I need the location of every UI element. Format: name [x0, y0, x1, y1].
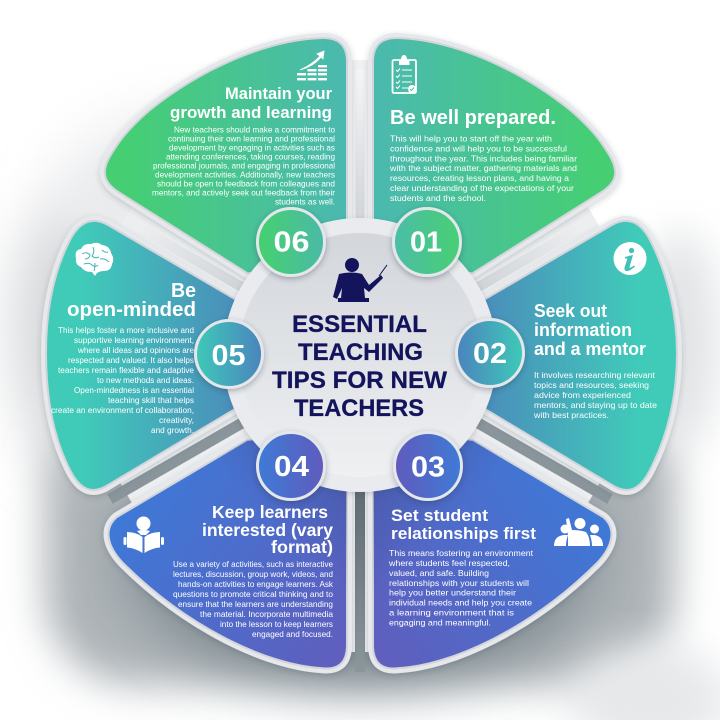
text: be open-minded body: create an environment of collaboration, — [51, 405, 194, 415]
text: be open-minded body: teachers remain flexible and adaptive — [58, 365, 194, 375]
icon: teacher with pointer — [333, 258, 387, 302]
heading: seek out information and a mentor: and a mentor — [534, 339, 646, 359]
text: set student relationships body: valued, and safe. Building — [389, 568, 489, 578]
panel: 05 be open-minded — [46, 221, 240, 490]
text: seek out information body: advice from experienced — [534, 390, 631, 400]
text: be open-minded body: Open-mindedness is an essential — [74, 385, 194, 395]
heading: be open-minded: Be — [171, 280, 196, 302]
heading: seek out information and a mentor: Seek out — [534, 301, 607, 321]
text: maintain growth body: continuing their own learning and professional — [168, 133, 335, 143]
text: maintain growth body: professional journals, and engaging in professional — [153, 160, 335, 170]
panel: 04 keep learners interested — [109, 430, 347, 669]
icon: growth chart — [297, 51, 327, 80]
badge 03 — [394, 432, 462, 500]
badge 04 — [258, 432, 324, 500]
text: keep learners body: into the lesson to keep learners — [220, 619, 333, 629]
badge 02: 02 — [473, 338, 507, 370]
badge 05: 05 — [212, 340, 246, 372]
text: keep learners body: hands-on activities to engage learners. Ask — [178, 579, 334, 589]
heading: maintain your growth and learning — [170, 84, 332, 122]
text: seek out information body: mentors, and staying up to date — [534, 400, 657, 410]
text: be open-minded body: creativity, — [159, 415, 194, 425]
text: be well prepared body — [389, 134, 577, 203]
text: set student relationships body: where students feel respected, — [388, 558, 510, 568]
heading: keep learners interested: interested (vary — [202, 520, 333, 540]
icon: person reading a book — [124, 516, 164, 553]
heading: keep learners interested: format) — [271, 537, 333, 557]
text: seek out information body: It involves researching relevant — [534, 370, 656, 380]
title: TEACHING — [298, 339, 423, 366]
text: maintain growth body: New teachers should make a commitment to — [174, 124, 335, 134]
text: be open-minded body: teaching skill that helps — [108, 395, 194, 405]
text: maintain growth body: attending conferences, taking courses, reading — [166, 151, 335, 161]
text: be open-minded body — [51, 325, 194, 435]
text: be open-minded body: supportive learning environment, — [74, 335, 194, 345]
text: keep learners body: questions to promote critical thinking and to — [173, 589, 333, 599]
text: maintain growth body: should be open to feedback from colleagues and — [157, 178, 335, 188]
title: ESSENTIAL — [292, 311, 427, 338]
text: set student relationships body: This means fostering an environment — [389, 548, 534, 558]
text: seek out information body — [533, 370, 657, 420]
title: TIPS FOR NEW — [272, 367, 448, 394]
icon: group of students — [554, 518, 603, 546]
text: maintain growth body: students as well. — [275, 196, 335, 206]
text: be open-minded body: to new methods and ideas. — [97, 375, 194, 385]
heading: be well prepared: Be well prepared. — [390, 107, 556, 129]
panel: 02 seek out information — [480, 221, 677, 490]
heading: set student relationships first — [391, 506, 536, 543]
text: set student relationships body: relationships with your students will — [389, 578, 529, 588]
text: maintain growth body: development by engaging in activities such as — [169, 142, 335, 152]
text: set student relationships body: engaging and meaningful. — [389, 618, 491, 628]
text: set student relationships body: individual needs and help you create — [389, 598, 532, 608]
heading: seek out information and a mentor — [534, 301, 646, 359]
text: set student relationships body: a learning environment that is — [389, 608, 514, 618]
text: be well prepared body: throughout the year. This includes being familiar — [390, 153, 577, 163]
heading: set student relationships first: Set student — [391, 506, 488, 525]
badge 01: 01 — [410, 226, 442, 258]
badge 06: 06 — [274, 226, 310, 258]
text: seek out information body: with best practices. — [533, 410, 609, 420]
heading: seek out information and a mentor: information — [534, 320, 632, 340]
heading: maintain your growth and learning: growth and learning — [170, 103, 332, 122]
title: TEACHERS — [294, 395, 424, 422]
text: be well prepared body: clear understanding of the expectations of your — [390, 183, 574, 193]
heading: keep learners interested: Keep learners — [212, 502, 328, 522]
text: keep learners body: engaged and focused. — [252, 629, 333, 639]
badge 04: 04 — [274, 451, 309, 483]
icon: information — [614, 242, 646, 275]
text: maintain growth body — [152, 124, 335, 206]
text: keep learners body: Use a variety of activities, such as interactive — [173, 559, 333, 569]
text: be open-minded body: and growth. — [151, 425, 194, 435]
title — [272, 311, 448, 422]
heading: be open-minded — [67, 280, 196, 321]
center disc — [223, 218, 497, 492]
badge 05 — [196, 320, 262, 388]
badge 02 — [456, 320, 524, 386]
badge 03: 03 — [411, 452, 445, 484]
panel: 06 maintain growth — [105, 38, 347, 280]
text: be well prepared body: resources, creating lesson plans, and having a — [390, 173, 569, 183]
text: be well prepared body: with the subject matter, gathering materials and — [389, 163, 577, 173]
panel: 03 set student relationships — [373, 430, 611, 669]
spokes between panels — [110, 60, 610, 672]
panel: 01 be well prepared — [373, 38, 615, 280]
text: be open-minded body: This helps foster a more inclusive and — [58, 325, 194, 335]
text: keep learners body: the material. Incorporate multimedia — [200, 609, 333, 619]
text: seek out information body: topics and resources, seeking — [534, 380, 649, 390]
text: be well prepared body: confidence and will help you to be successful — [390, 143, 567, 153]
heading: be open-minded: open-minded — [67, 299, 196, 321]
badge 01 — [394, 208, 460, 276]
text: be open-minded body: respected and valued. It also helps — [68, 355, 194, 365]
text: be well prepared body: This will help you to start off the year with — [390, 134, 552, 144]
text: keep learners body — [173, 559, 334, 639]
text: be well prepared body: students and the school. — [390, 193, 486, 203]
icon: clipboard checklist — [392, 55, 416, 93]
text: set student relationships body: help you better understand their — [389, 588, 516, 598]
text: maintain growth body: development activities. Additionally, new teachers — [155, 169, 335, 179]
text: maintain growth body: mentors, and actively seek out feedback from their — [152, 187, 335, 197]
badge 06 — [258, 208, 324, 276]
text: keep learners body: lectures, discussion, group work, videos, and — [173, 569, 333, 579]
heading: maintain your growth and learning: Maintain your — [225, 84, 332, 103]
text: be open-minded body: where all ideas and opinions are — [77, 345, 194, 355]
icon: brain — [76, 243, 113, 276]
text: set student relationships body — [388, 548, 534, 628]
heading: keep learners interested — [202, 502, 333, 557]
text: keep learners body: ensure that the learners are understanding — [178, 599, 333, 609]
heading: set student relationships first: relationships first — [391, 524, 536, 543]
